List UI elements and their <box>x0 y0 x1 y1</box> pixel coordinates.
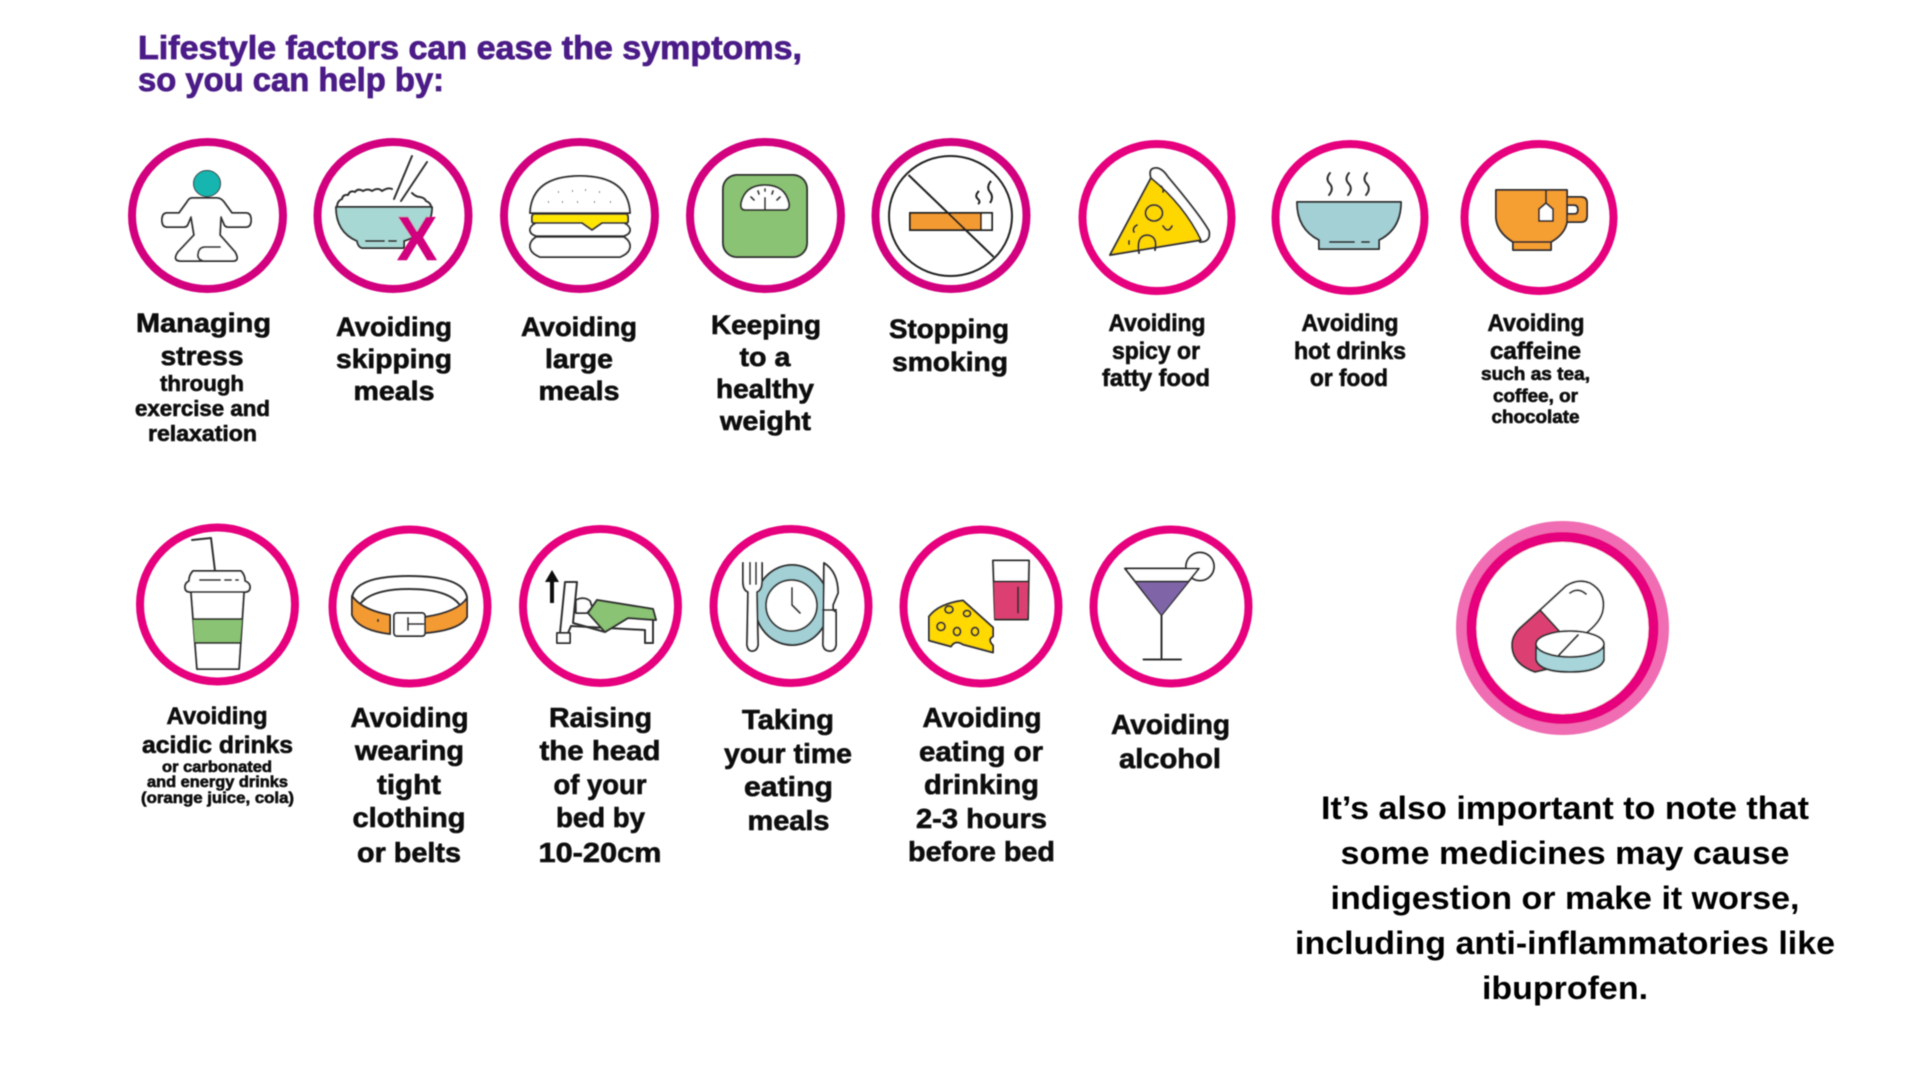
item: taking your time eating meals <box>714 529 868 836</box>
text block: medicines note: It’s also important to note that <box>1321 790 1809 826</box>
label: raising the head of your bed: 10-20cm <box>538 837 662 868</box>
label: avoiding tight clothing or belts: wearing <box>354 735 464 766</box>
label: managing stress: through <box>160 371 244 396</box>
item: raising the head of your bed <box>523 529 678 868</box>
label: avoiding acidic drinks: acidic drinks <box>142 732 293 759</box>
label: taking your time eating meals: your time <box>724 738 852 769</box>
label: avoiding tight clothing or belts: clothing <box>352 802 466 833</box>
icon: pizza slice <box>1082 144 1232 291</box>
label: raising the head of your bed: bed by <box>556 802 645 833</box>
icon: raised bed <box>523 529 678 683</box>
label: avoiding skipping meals <box>336 312 452 406</box>
label: avoiding skipping meals: skipping <box>336 344 452 374</box>
label: taking your time eating meals <box>724 704 852 836</box>
label: keeping to a healthy weight: weight <box>719 406 811 436</box>
title <box>138 29 802 98</box>
icon: takeaway cup <box>140 528 295 682</box>
item: avoiding hot drinks or food <box>1276 144 1424 392</box>
label: raising the head of your bed: Raising <box>549 702 652 733</box>
label: avoiding acidic drinks: Avoiding <box>166 703 268 730</box>
label: avoiding large meals <box>521 312 637 406</box>
label: avoiding eating before bed: 2-3 hours <box>916 803 1047 834</box>
icon: pills <box>1456 521 1669 735</box>
label: avoiding large meals: large <box>545 344 613 374</box>
text block: medicines note: indigestion or make it worse, <box>1330 880 1800 916</box>
label: keeping to a healthy weight <box>711 310 821 436</box>
label: avoiding tight clothing or belts <box>350 702 468 868</box>
label: raising the head of your bed <box>538 702 662 868</box>
label: avoiding eating before bed: Avoiding <box>922 702 1042 733</box>
item: avoiding acidic drinks <box>140 528 295 807</box>
label: keeping to a healthy weight: Keeping <box>711 310 821 340</box>
icon: meditating person <box>132 142 283 289</box>
label: managing stress: exercise and <box>135 396 270 421</box>
label: avoiding caffeine: Avoiding <box>1488 310 1584 337</box>
label: avoiding tight clothing or belts: tight <box>377 769 441 800</box>
icon: steaming bowl <box>1276 144 1424 291</box>
label: avoiding tight clothing or belts: or belts <box>357 837 461 868</box>
text block: medicines note: some medicines may cause <box>1340 835 1790 871</box>
label: avoiding skipping meals: meals <box>354 376 434 406</box>
label: avoiding large meals: meals <box>538 376 620 406</box>
label: avoiding large meals: Avoiding <box>521 312 637 342</box>
label: stopping smoking <box>889 314 1009 377</box>
label: taking your time eating meals: meals <box>748 805 830 836</box>
item: managing stress <box>132 142 283 446</box>
label: managing stress: Managing <box>136 308 271 338</box>
label: avoiding acidic drinks: and energy drinks <box>147 774 288 791</box>
item: keeping to a healthy weight <box>690 142 841 436</box>
label: stopping smoking: smoking <box>892 347 1008 377</box>
label: avoiding acidic drinks: (orange juice, cola) <box>141 790 294 807</box>
label: avoiding caffeine: coffee, or <box>1493 386 1578 406</box>
label: avoiding alcohol: Avoiding <box>1111 709 1230 740</box>
label: taking your time eating meals: eating <box>744 771 833 802</box>
icon: rice bowl crossed: X <box>397 205 437 274</box>
title: Lifestyle factors can ease the symptoms, <box>138 29 802 66</box>
icon: belt <box>332 530 488 684</box>
panel: medicines note <box>1295 521 1835 1006</box>
icon: martini glass <box>1094 530 1248 684</box>
label: avoiding caffeine <box>1481 310 1590 427</box>
label: managing stress: relaxation <box>148 421 257 446</box>
label: avoiding hot drinks or food: or food <box>1310 365 1388 392</box>
item: avoiding skipping meals <box>318 142 468 406</box>
label: avoiding caffeine: chocolate <box>1492 407 1580 427</box>
label: taking your time eating meals: Taking <box>742 704 834 735</box>
icon: burger <box>504 142 655 289</box>
label: avoiding acidic drinks: or carbonated <box>162 759 272 776</box>
label: managing stress <box>135 308 271 446</box>
item: avoiding alcohol <box>1094 530 1248 774</box>
label: avoiding alcohol <box>1111 709 1230 774</box>
item: avoiding large meals <box>504 142 655 406</box>
label: keeping to a healthy weight: healthy <box>716 374 814 404</box>
text block: medicines note <box>1295 790 1835 1006</box>
icon: weighing scale <box>690 142 841 289</box>
label: avoiding spicy or fatty food <box>1102 310 1210 392</box>
item: stopping smoking <box>876 142 1026 377</box>
label: avoiding hot drinks or food <box>1294 310 1406 392</box>
label: avoiding spicy or fatty food: spicy or <box>1112 338 1200 365</box>
item: avoiding caffeine <box>1464 144 1614 427</box>
label: raising the head of your bed: the head <box>540 735 660 766</box>
label: avoiding spicy or fatty food: Avoiding <box>1108 310 1206 337</box>
text block: medicines note: including anti-inflammatories like <box>1295 925 1835 961</box>
label: avoiding hot drinks or food: Avoiding <box>1302 310 1398 337</box>
label: avoiding spicy or fatty food: fatty food <box>1102 365 1210 392</box>
label: managing stress: stress <box>160 341 244 371</box>
label: avoiding caffeine: such as tea, <box>1481 364 1590 384</box>
item: avoiding eating before bed <box>904 530 1058 867</box>
label: avoiding skipping meals: Avoiding <box>336 312 452 342</box>
label: avoiding alcohol: alcohol <box>1119 743 1221 774</box>
icon: tea cup <box>1464 144 1614 291</box>
item: avoiding spicy or fatty food <box>1082 144 1232 392</box>
item: avoiding tight clothing or belts <box>332 530 488 868</box>
label: stopping smoking: Stopping <box>889 314 1009 344</box>
label: avoiding eating before bed <box>908 702 1055 867</box>
label: avoiding caffeine: caffeine <box>1490 338 1581 365</box>
title: so you can help by: <box>138 61 444 98</box>
label: raising the head of your bed: of your <box>554 769 647 800</box>
label: avoiding eating before bed: eating or <box>919 736 1043 767</box>
label: avoiding tight clothing or belts: Avoiding <box>350 702 468 733</box>
icon: rice bowl crossed <box>318 142 468 289</box>
label: avoiding eating before bed: before bed <box>908 836 1055 867</box>
label: keeping to a healthy weight: to a <box>740 342 792 372</box>
label: avoiding acidic drinks <box>141 703 294 807</box>
label: avoiding eating before bed: drinking <box>924 769 1039 800</box>
icon: cheese and drink <box>904 530 1058 684</box>
text block: medicines note: ibuprofen. <box>1482 970 1648 1006</box>
icon: clock plate with cutlery <box>714 529 868 683</box>
label: avoiding hot drinks or food: hot drinks <box>1294 338 1406 365</box>
icon: no smoking <box>876 142 1026 289</box>
